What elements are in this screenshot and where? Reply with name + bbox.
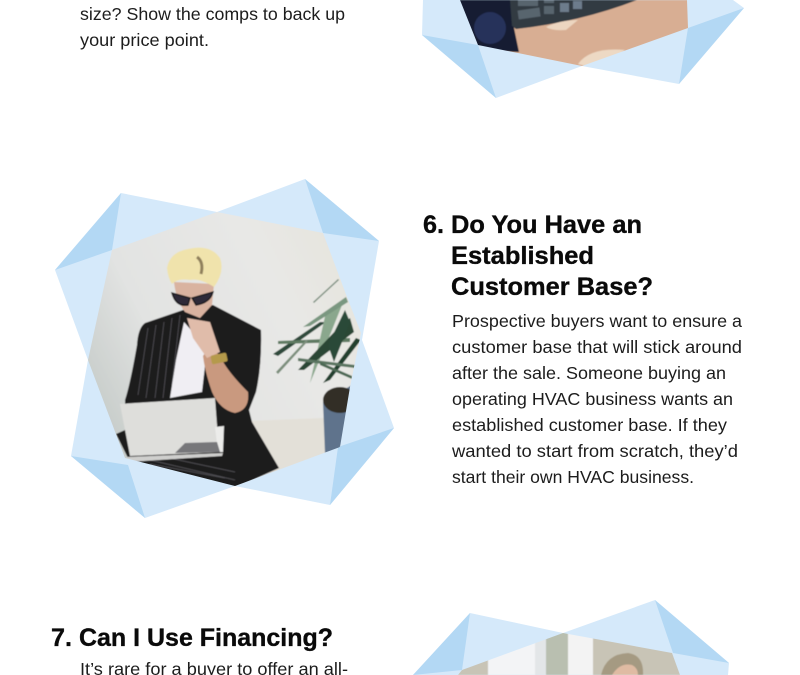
pot [323,385,352,453]
text block: item 6 body: Prospective buyers want to ensure a [452,311,742,331]
text block: item 6 body [451,311,742,487]
image: calculator photo in blue frame [422,0,744,98]
plant leaves [273,279,361,383]
arm and hand [203,350,248,413]
glasses [172,292,213,305]
text block: item 5 ending: size? Show the comps to back up [80,4,345,24]
image: woman in bright room in blue frame [413,600,729,675]
jacket and trousers [116,305,279,488]
floor [252,418,325,473]
text block: item 5 ending: your price point. [80,30,209,50]
heading: item 6: Established [451,242,594,270]
image: woman with laptop in blue frame [55,179,394,518]
text block: item 6 body: start their own HVAC business. [452,467,694,487]
heading: item 6: 6. [423,211,444,239]
heading: item 6: Customer Base? [451,273,653,301]
neck and face [174,282,214,318]
pinstripes [138,315,235,480]
heading: item 7: Can I Use Financing? [79,624,333,652]
heading: item 7: 7. [51,624,72,652]
text block: item 6 body: established customer base. If they [452,415,727,435]
heading: item 6 [423,211,653,301]
text block: item 5 ending [80,4,345,50]
text block: item 6 body: operating HVAC business wants an [452,389,733,409]
text block: item 6 body: wanted to start from scratch, they’d [451,441,738,461]
t-shirt [170,322,207,398]
text block: item 6 body: after the sale. Someone buying an [452,363,726,383]
heading: item 6: Do You Have an [451,211,642,239]
hair [167,248,222,287]
text block: item 6 body: customer base that will stick around [452,337,742,357]
laptop [120,398,219,456]
